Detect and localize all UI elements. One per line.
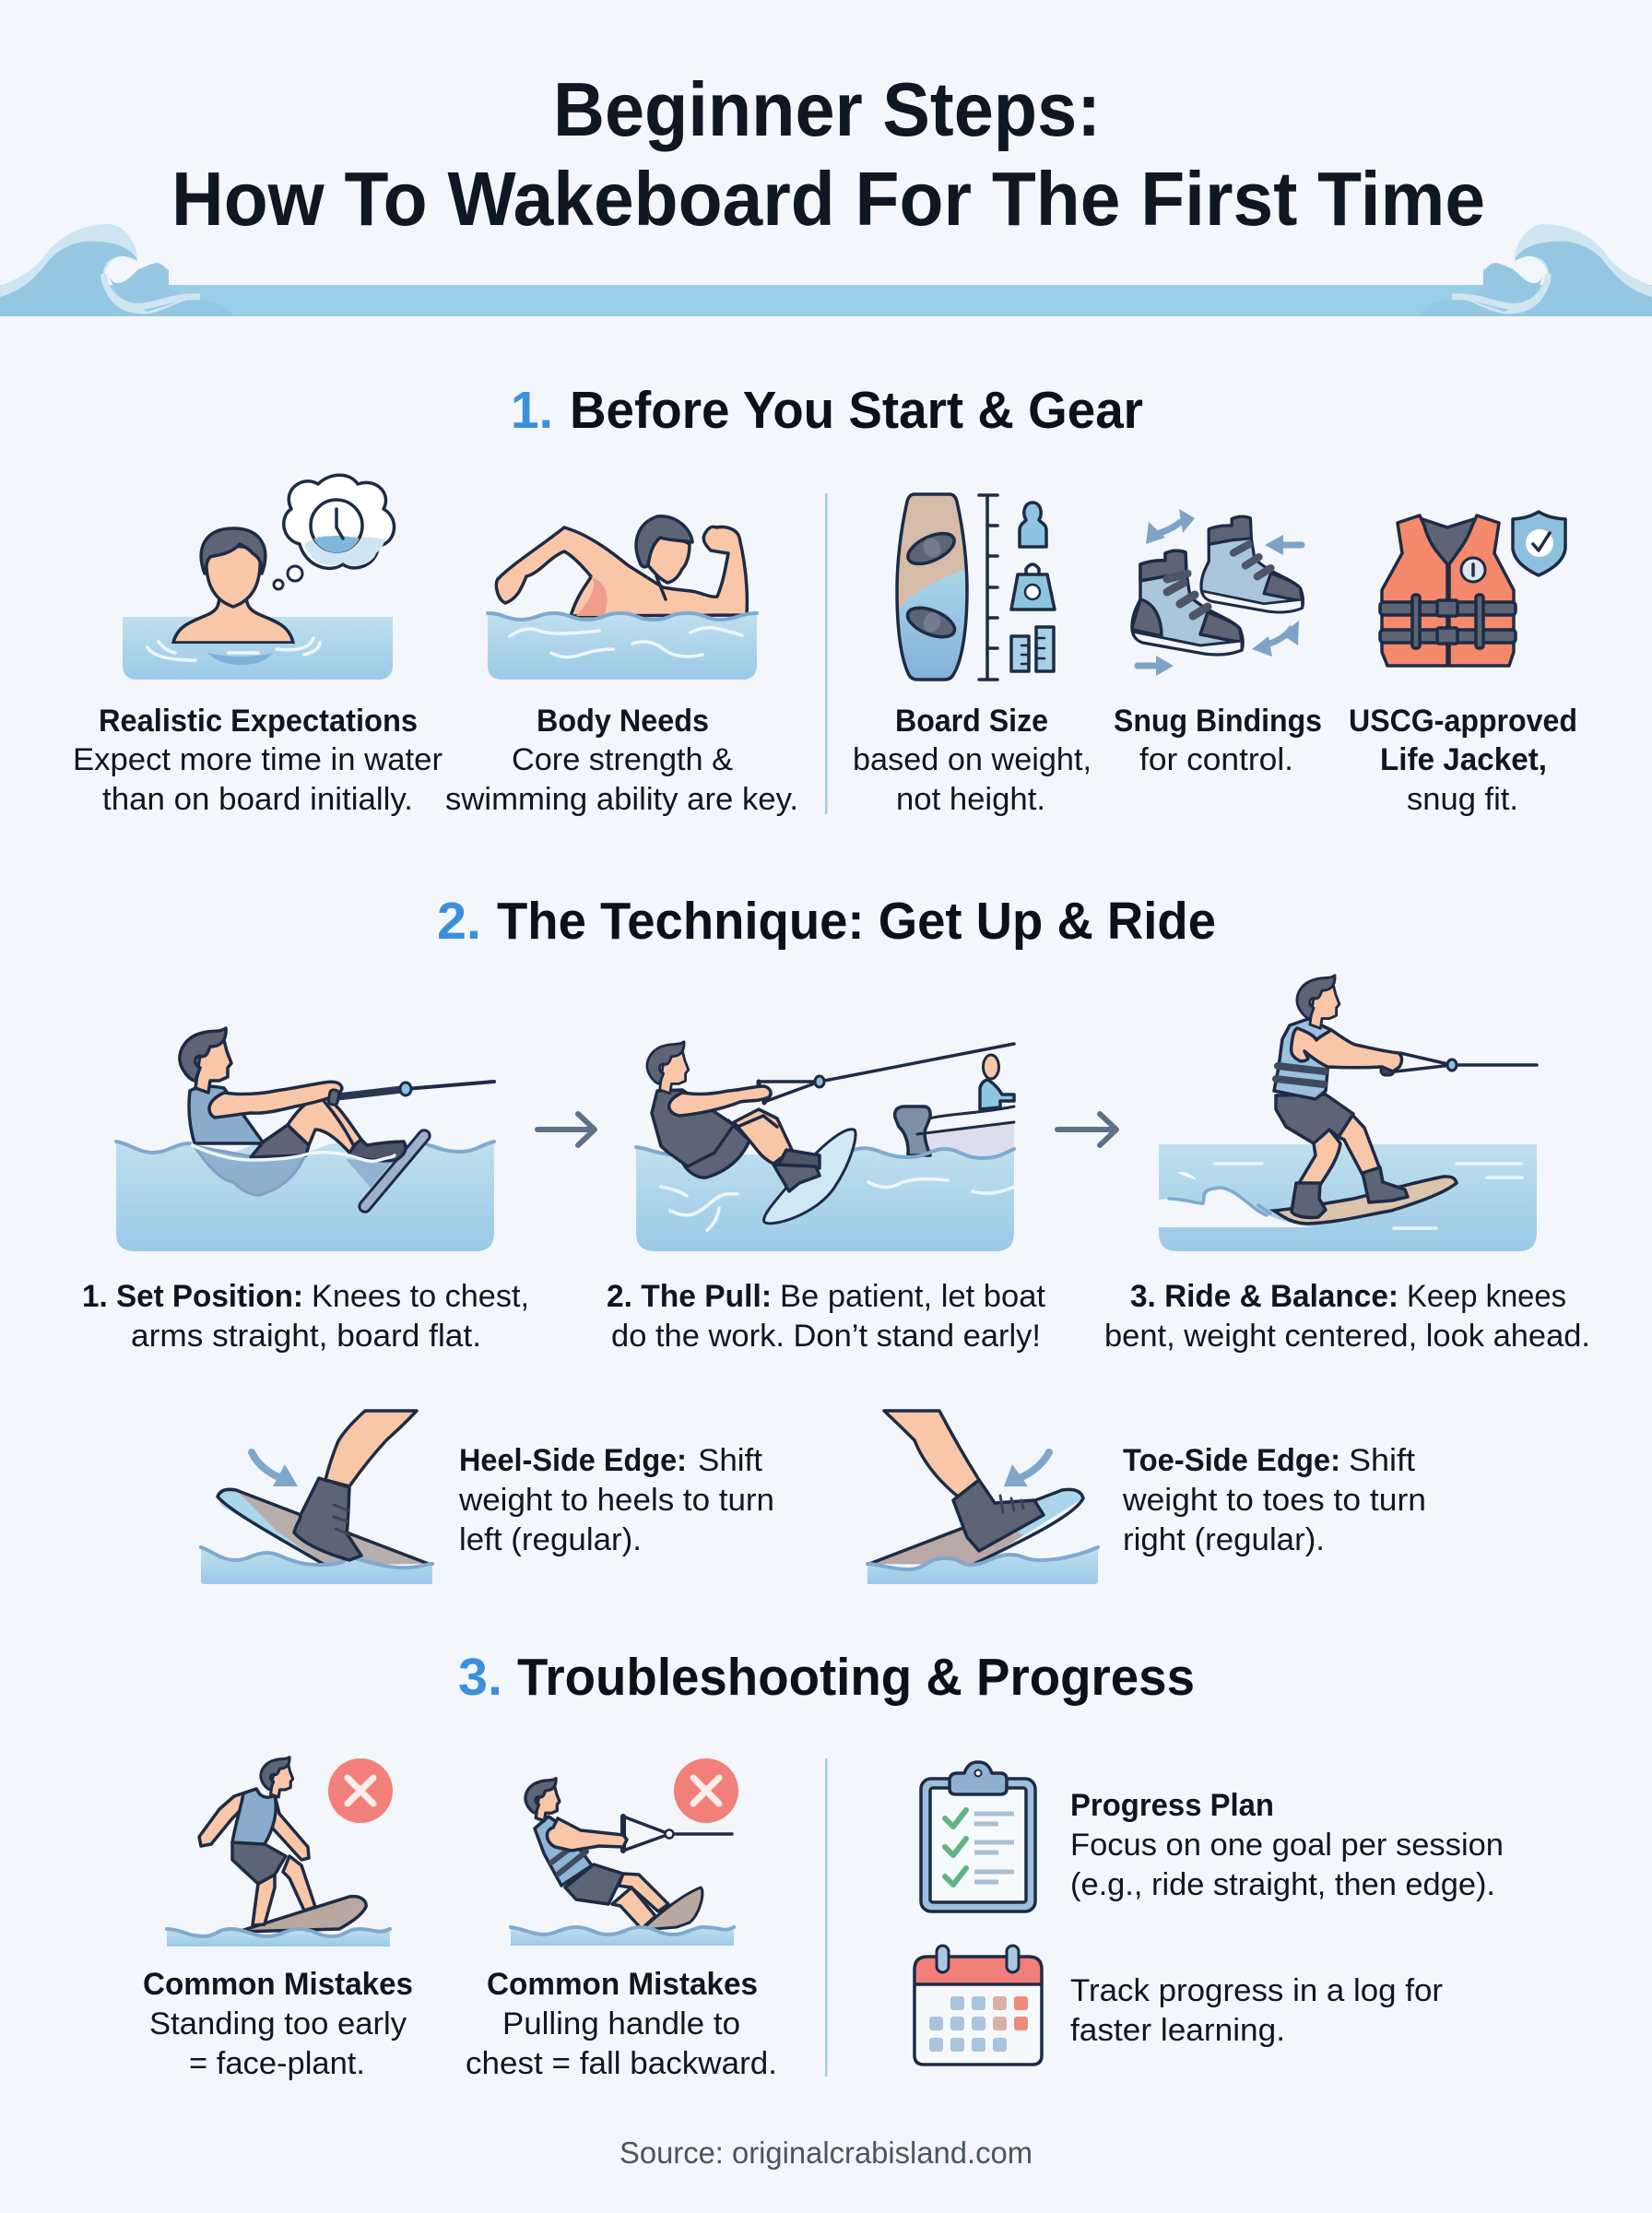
text: mistake 1: = face-plant. bbox=[189, 2046, 365, 2081]
title: body needs: swimming ability are key. bbox=[445, 782, 798, 817]
title: life jacket bbox=[1349, 704, 1577, 817]
icon: red x badge bbox=[674, 1758, 738, 1823]
text: mistake 1 bbox=[143, 1967, 413, 2081]
icon: wakeboard sizing bbox=[897, 494, 1055, 680]
arrow: step 1 to step 2 bbox=[537, 1114, 595, 1145]
title: realistic expectations: Realistic Expectations bbox=[99, 704, 418, 739]
text: step 3 bbox=[1104, 1279, 1590, 1354]
title: realistic expectations: than on board initially. bbox=[102, 782, 413, 817]
icon: bindings boots bbox=[1132, 509, 1304, 676]
title: Beginner Steps: bbox=[553, 66, 1101, 152]
header wave band bbox=[0, 224, 1652, 316]
text: track progress bbox=[1070, 1973, 1443, 2048]
arrow: step 2 to step 3 bbox=[1057, 1114, 1116, 1145]
icon: calendar bbox=[914, 1946, 1042, 2065]
text: progress plan: Progress Plan bbox=[1070, 1788, 1274, 1823]
illustration: step 2 the pull bbox=[636, 1042, 1014, 1251]
text: progress plan: Focus on one goal per session bbox=[1070, 1828, 1504, 1863]
text: progress plan: (e.g., ride straight, then edge). bbox=[1070, 1867, 1495, 1902]
text: mistake 1: Common Mistakes bbox=[143, 1967, 413, 2002]
text: heel-side edge: Shift bbox=[698, 1443, 763, 1478]
text: step 2: do the work. Don’t stand early! bbox=[611, 1319, 1041, 1354]
title: board size: not height. bbox=[896, 782, 1045, 817]
section heading 1: Before You Start & Gear bbox=[570, 381, 1143, 440]
text: toe-side edge bbox=[1122, 1443, 1426, 1557]
illustration: step 1 set position bbox=[116, 1028, 494, 1251]
title: body needs: Core strength & bbox=[512, 742, 733, 777]
title: board size bbox=[853, 704, 1092, 817]
title: body needs: Body Needs bbox=[537, 704, 709, 739]
illustration: pulling handle mistake bbox=[511, 1758, 738, 1946]
text: step 3: bent, weight centered, look ahead. bbox=[1104, 1319, 1590, 1354]
icon: person in water thinking of clock bbox=[123, 475, 394, 680]
text: toe-side edge: right (regular). bbox=[1123, 1522, 1325, 1557]
text: toe-side edge: weight to toes to turn bbox=[1122, 1483, 1426, 1518]
section heading 1: 1. bbox=[511, 381, 553, 440]
text: mistake 2: Pulling handle to bbox=[502, 2006, 740, 2041]
title: snug bindings: Snug Bindings bbox=[1114, 704, 1322, 739]
title: snug bindings: for control. bbox=[1139, 742, 1293, 777]
text: step 2: Be patient, let boat bbox=[780, 1279, 1046, 1314]
text: toe-side edge: Toe-Side Edge: bbox=[1123, 1443, 1340, 1478]
section heading 2: 2. bbox=[437, 892, 481, 951]
text: step 1: 1. Set Position: bbox=[82, 1279, 303, 1314]
illustration: heel-side edge bbox=[201, 1411, 432, 1584]
title: life jacket: USCG-approved bbox=[1349, 704, 1577, 739]
text: step 3: Keep knees bbox=[1407, 1279, 1566, 1314]
text: mistake 2: Common Mistakes bbox=[487, 1967, 758, 2002]
title: life jacket: Life Jacket, bbox=[1380, 742, 1547, 777]
section heading 3: 3. bbox=[458, 1648, 502, 1707]
icon: red x badge bbox=[328, 1758, 393, 1823]
text: step 2 bbox=[607, 1279, 1046, 1354]
text: track progress: faster learning. bbox=[1070, 2013, 1285, 2048]
illustration: standing too early mistake bbox=[167, 1757, 393, 1947]
title: board size: based on weight, bbox=[853, 742, 1092, 777]
text: mistake 2 bbox=[466, 1967, 777, 2081]
text: progress plan bbox=[1070, 1788, 1504, 1902]
title: realistic expectations bbox=[73, 704, 442, 817]
icon: life jacket with shield bbox=[1380, 512, 1565, 666]
text: heel-side edge bbox=[458, 1443, 774, 1557]
text: track progress: Track progress in a log for bbox=[1070, 1973, 1443, 2008]
section heading 3: Troubleshooting & Progress bbox=[517, 1648, 1195, 1707]
section heading 2: The Technique: Get Up & Ride bbox=[497, 892, 1216, 951]
title: How To Wakeboard For The First Time bbox=[171, 156, 1485, 242]
text: heel-side edge: left (regular). bbox=[459, 1522, 642, 1557]
text: step 3: 3. Ride & Balance: bbox=[1130, 1279, 1398, 1314]
text: mistake 2: chest = fall backward. bbox=[466, 2046, 777, 2081]
text: step 2: 2. The Pull: bbox=[607, 1279, 772, 1314]
illustration: toe-side edge bbox=[867, 1411, 1098, 1584]
text: step 1: Knees to chest, bbox=[312, 1279, 529, 1314]
vertical divider 2 bbox=[825, 1758, 828, 2077]
title: body needs bbox=[445, 704, 798, 817]
text: mistake 1: Standing too early bbox=[149, 2006, 407, 2041]
vertical divider 1 bbox=[825, 493, 828, 814]
title bbox=[171, 66, 1485, 242]
title: life jacket: snug fit. bbox=[1407, 782, 1518, 817]
title: snug bindings bbox=[1114, 704, 1322, 777]
title: realistic expectations: Expect more time in water bbox=[73, 742, 442, 777]
icon: swimmer flexing bbox=[488, 516, 757, 680]
text: step 1 bbox=[82, 1279, 529, 1354]
text: toe-side edge: Shift bbox=[1349, 1443, 1416, 1478]
text: step 1: arms straight, board flat. bbox=[131, 1319, 481, 1354]
text: heel-side edge: weight to heels to turn bbox=[458, 1483, 774, 1518]
title: board size: Board Size bbox=[895, 704, 1048, 739]
icon: clipboard checklist bbox=[921, 1762, 1035, 1911]
source line: Source: originalcrabisland.com bbox=[620, 2136, 1032, 2170]
illustration: step 3 ride and balance bbox=[1159, 976, 1537, 1251]
text: heel-side edge: Heel-Side Edge: bbox=[459, 1443, 687, 1478]
